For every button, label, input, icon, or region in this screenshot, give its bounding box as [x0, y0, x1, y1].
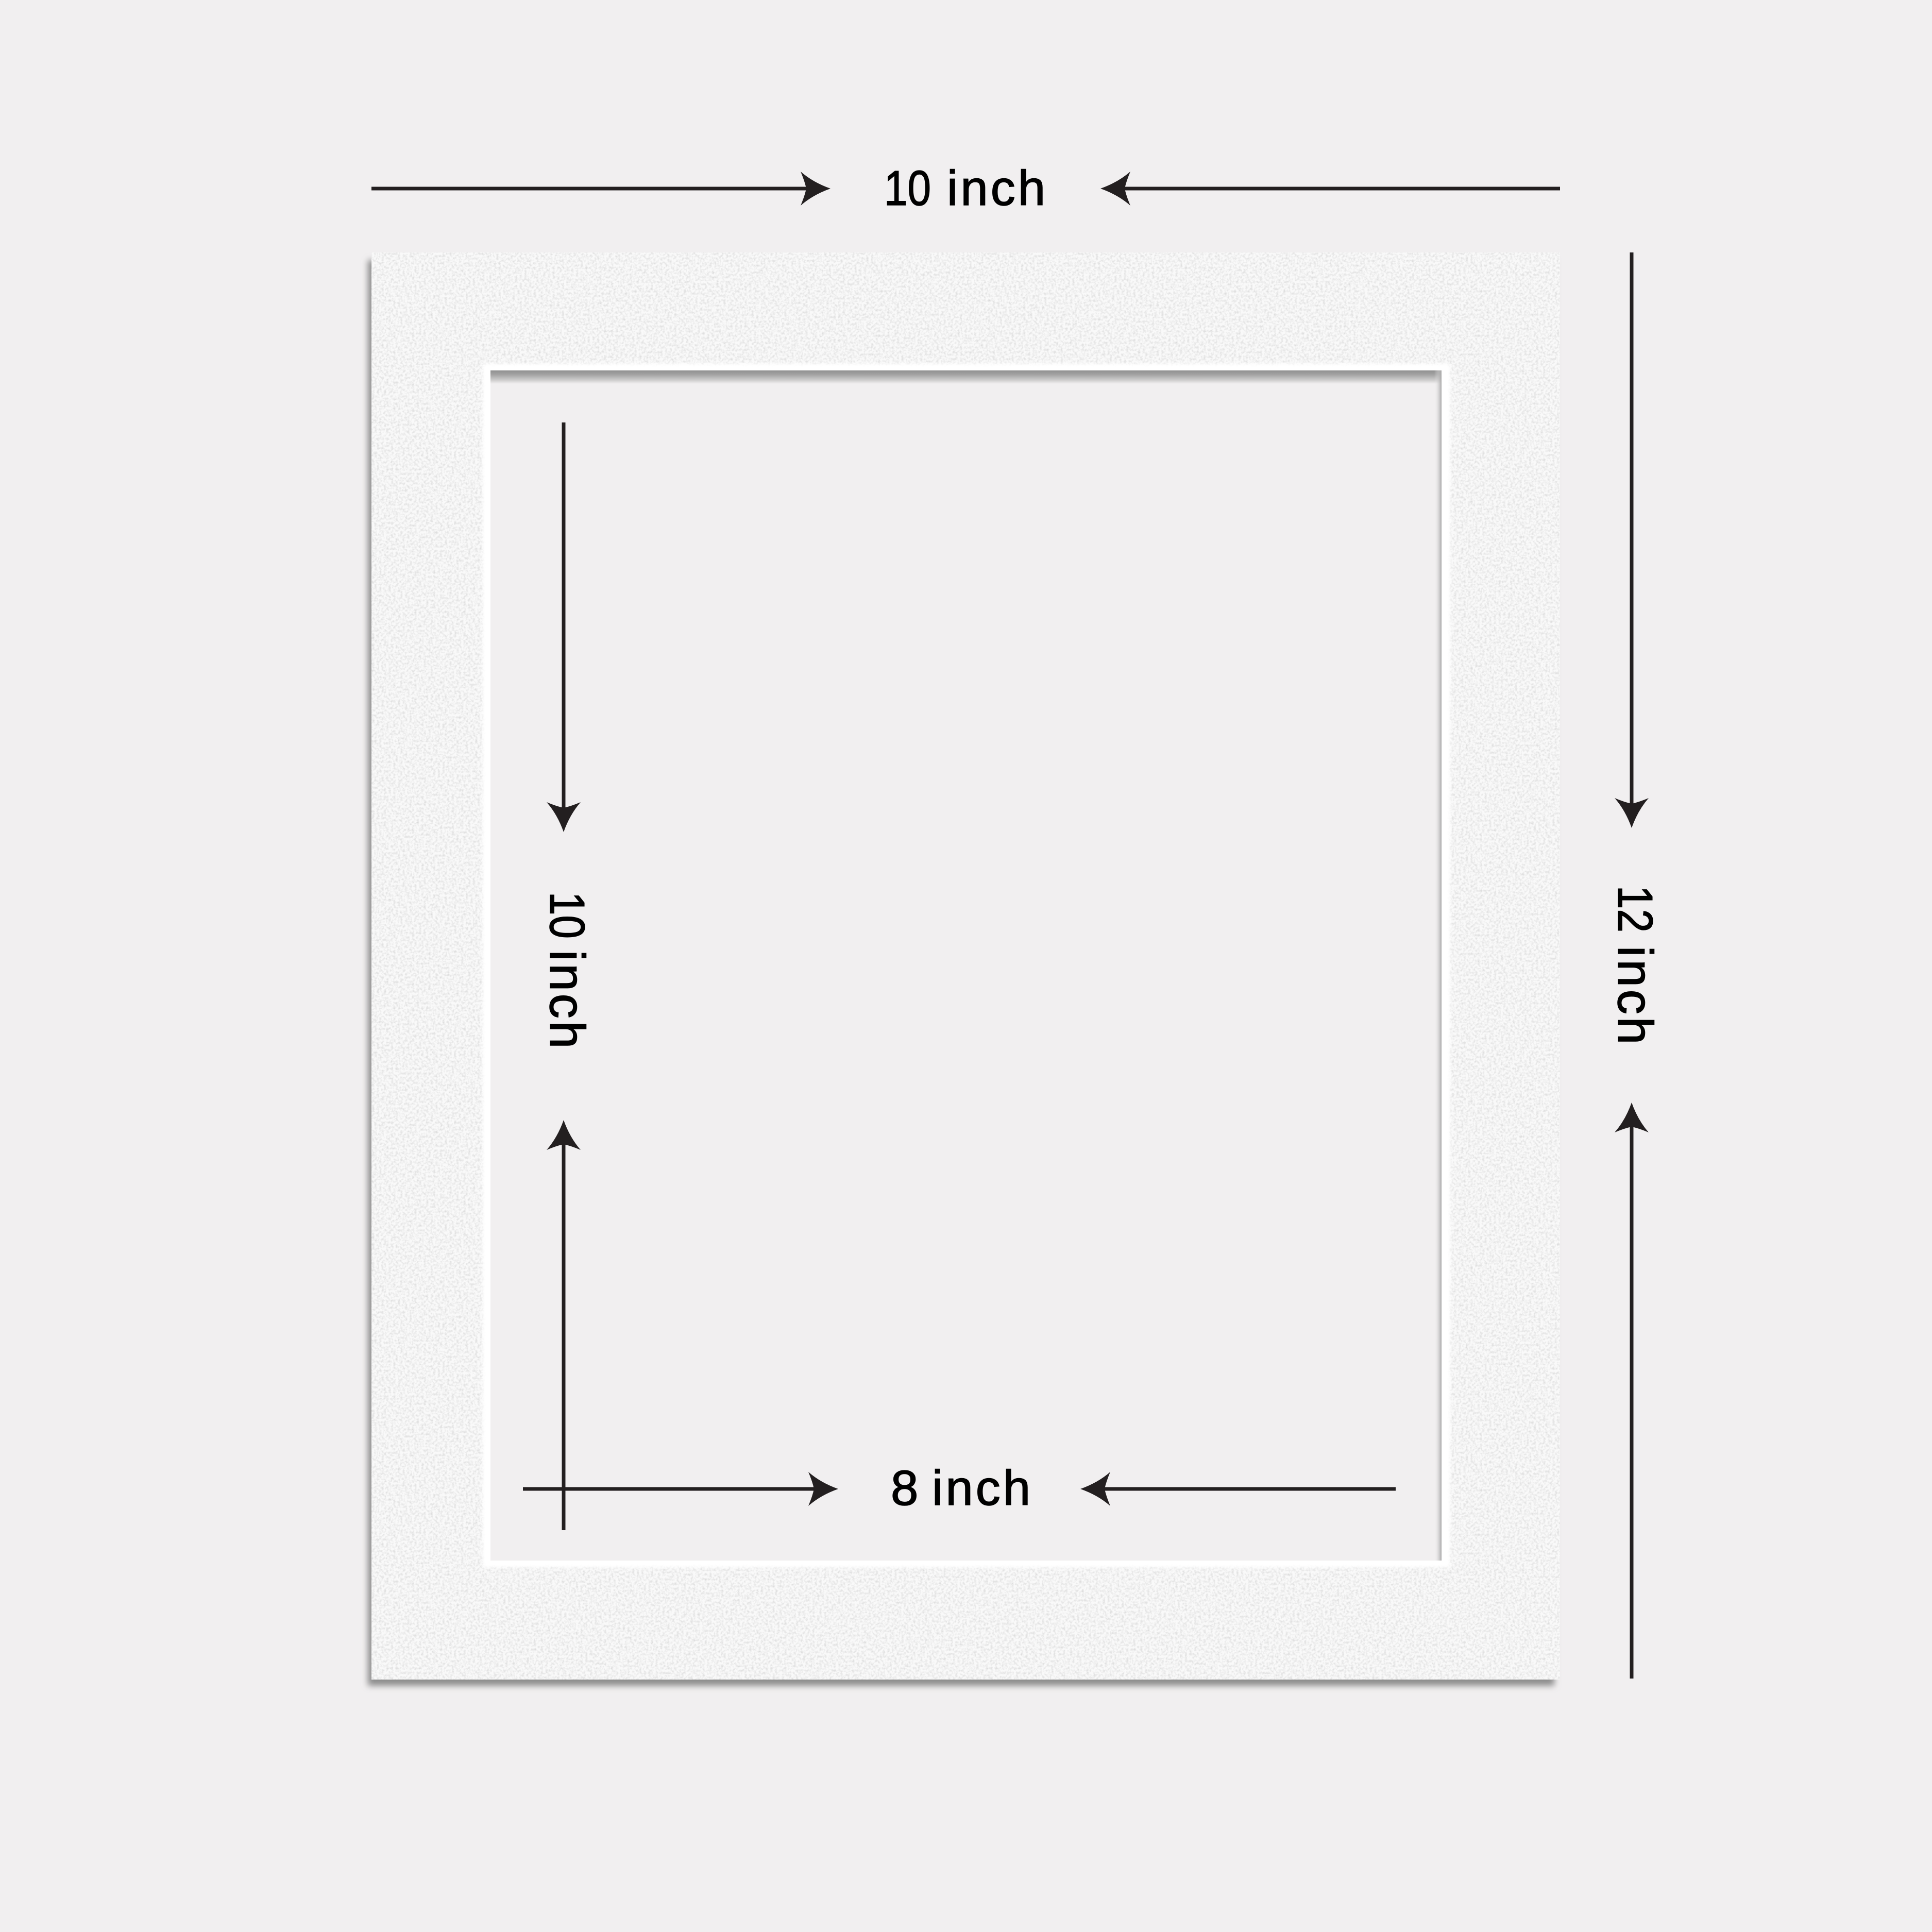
window opening: [490, 370, 1442, 1561]
label: 10 inch outer width: 10: [884, 161, 931, 216]
label: 12 inch outer height: 12: [1607, 886, 1663, 933]
arrow: right side pointing down: [1615, 252, 1649, 828]
inner bottom dimension: opening width 8 inch: [523, 1461, 1396, 1516]
label: 10 inch outer width: inch: [947, 161, 1048, 216]
label: 12 inch outer height: inch: [1607, 946, 1663, 1047]
arrow: inner left pointing down: [547, 422, 581, 832]
inner left dimension: opening height 10 inch: [539, 422, 595, 1530]
label: 10 inch opening height: inch: [539, 950, 595, 1051]
arrow: top right pointing left: [1100, 172, 1560, 206]
arrow: right side pointing up: [1615, 1103, 1649, 1679]
arrow: top left pointing right: [371, 172, 831, 206]
window white bevel: [483, 364, 1450, 1567]
label: 8 inch opening width: 8: [891, 1461, 918, 1516]
mat textured surface: [371, 252, 1560, 1680]
arrow: inner bottom pointing right: [523, 1472, 838, 1506]
panel: mat board: [368, 252, 1560, 1686]
mat drop shadow: [368, 260, 1554, 1686]
arrow: inner bottom pointing left: [1080, 1472, 1396, 1506]
arrow: inner left pointing up: [547, 1120, 581, 1530]
right dimension: outer height 12 inch: [1607, 252, 1663, 1679]
label: 8 inch opening width: inch: [932, 1461, 1033, 1516]
top dimension: outer width 10 inch: [371, 161, 1560, 216]
label: 10 inch opening height: 10: [539, 892, 595, 939]
